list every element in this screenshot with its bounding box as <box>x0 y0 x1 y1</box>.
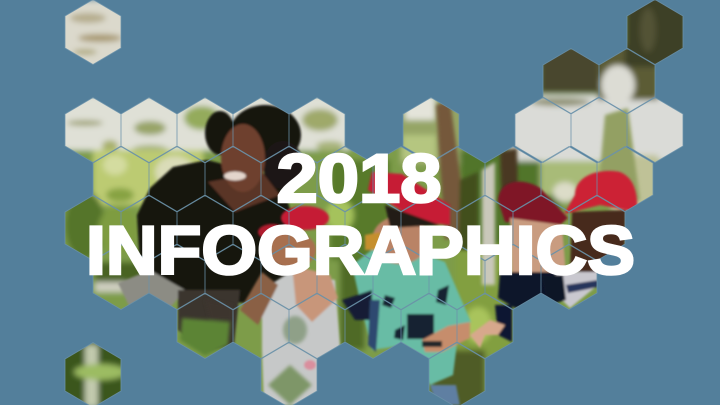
title: main word: INFOGRAPHICS <box>86 212 635 289</box>
title <box>86 140 635 289</box>
photo: tree trunks and pole <box>436 100 640 285</box>
plant: in front of the girl <box>268 316 312 405</box>
title: year: 2018 <box>276 140 442 217</box>
figure: boy in dark red cap <box>470 182 570 348</box>
figure: girl with red cap <box>240 206 340 405</box>
plant: under the woman <box>179 316 232 356</box>
figure: woman teacher <box>118 105 303 350</box>
figure: boy in teal star shirt <box>342 172 471 405</box>
figure: boy in bright red cap <box>541 171 637 308</box>
